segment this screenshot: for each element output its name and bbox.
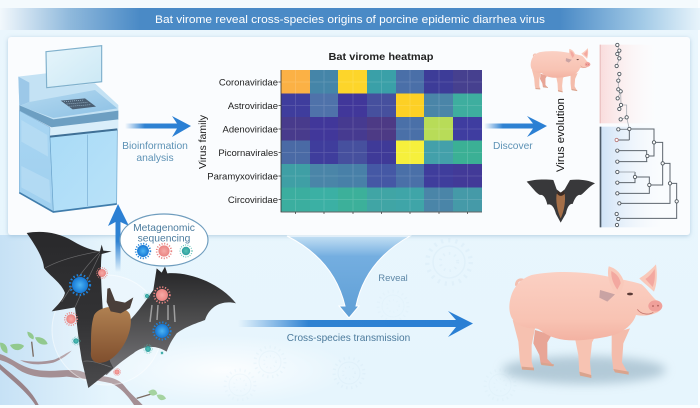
arrow: to heatmap bbox=[125, 116, 191, 137]
arrow: to virus evolution bbox=[484, 116, 547, 137]
callout: metagenomic sequencing: sequencing bbox=[138, 234, 191, 244]
icon: pink virus bbox=[157, 244, 171, 258]
icon: small bat bbox=[527, 179, 595, 223]
head bbox=[107, 288, 133, 313]
arrow: metagenomic sequencing upward bbox=[108, 204, 129, 272]
label: discover: Discover bbox=[493, 141, 533, 152]
heatmap row labels: Circoviridae bbox=[228, 195, 278, 206]
left wing bbox=[27, 232, 113, 388]
chart: phylogenetic tree bbox=[600, 43, 678, 227]
icon: sequencing machine bbox=[18, 46, 118, 212]
arrow: reveal funnel bbox=[287, 236, 410, 318]
label: cross-species transmission: Cross-species transmission bbox=[287, 333, 410, 344]
callout: metagenomic sequencing: Metagenomic bbox=[133, 223, 195, 234]
title: Bat virome reveal cross-species origins of porcine epidemic diarrhea virus bbox=[155, 14, 546, 26]
heatmap chart bbox=[207, 70, 482, 214]
heatmap row labels: Paramyxoviridae bbox=[207, 172, 278, 182]
label: virus evolution: Virus evolution bbox=[555, 98, 567, 172]
arrow: cross-species transmission bbox=[238, 311, 473, 337]
heatmap row labels: Picornavirales bbox=[218, 148, 278, 159]
label: bioinformation analysis: analysis bbox=[136, 153, 174, 164]
icon: bat with viruses bbox=[27, 232, 236, 388]
right wing bbox=[97, 267, 236, 375]
body bbox=[91, 307, 131, 363]
label: virus family axis: Virus family bbox=[197, 114, 209, 169]
label: reveal: Reveal bbox=[378, 273, 408, 284]
icon: large pig bbox=[502, 264, 666, 384]
heatmap row labels: Astroviridae bbox=[228, 101, 278, 112]
title banner bbox=[0, 8, 700, 30]
heatmap row labels bbox=[207, 78, 278, 206]
icon: teal virus bbox=[180, 245, 192, 257]
callout: metagenomic sequencing bbox=[120, 214, 208, 266]
heatmap row labels: Adenoviridae bbox=[223, 124, 278, 136]
panel: workflow bbox=[8, 37, 690, 235]
heading: heatmap title: Bat virome heatmap bbox=[328, 51, 434, 63]
icon: small pig bbox=[531, 48, 590, 92]
heatmap row labels: Coronaviridae bbox=[219, 78, 278, 88]
icon: blue virus bbox=[136, 244, 150, 258]
icon: branch with leaves bbox=[0, 332, 166, 405]
label: bioinformation analysis: Bioinformation bbox=[122, 141, 188, 152]
virus particles bbox=[65, 268, 175, 375]
